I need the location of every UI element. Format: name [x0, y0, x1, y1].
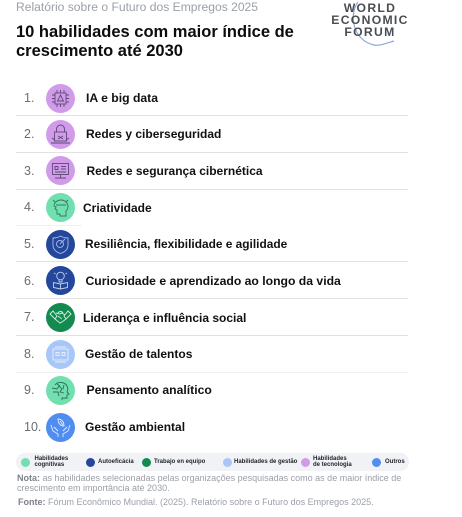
- legend: cognitivas: [34, 462, 64, 468]
- icon: hands holding leaf: [46, 413, 75, 442]
- row 5: [24, 230, 287, 259]
- icon: creative head: [46, 193, 75, 222]
- row 1: IA e big data: [86, 91, 158, 105]
- row 4: [24, 193, 152, 222]
- row 4: Criatividade: [83, 200, 152, 214]
- logo: World Economic Forum: [331, 0, 409, 46]
- note: [17, 472, 401, 493]
- note: crescimento em importância até 2030.: [17, 483, 170, 493]
- row 5: 5.: [24, 237, 34, 251]
- icon: lightbulb over book: [46, 266, 75, 295]
- row 10: [24, 413, 185, 442]
- row 6: [24, 266, 341, 295]
- icon: handshake: [46, 303, 75, 332]
- legend: Autoeficácia: [98, 459, 134, 465]
- logo: World Economic Forum: ECONOMIC: [331, 12, 409, 26]
- legend: Habilidades de gestão: [234, 459, 297, 465]
- icon: shield target: [46, 230, 75, 259]
- row 6: Curiosidade e aprendizado ao longo da vida: [86, 274, 341, 288]
- legend: Trabajo en equipo: [154, 459, 205, 465]
- row 8: [24, 340, 192, 369]
- row 6: 6.: [24, 274, 34, 288]
- row 2: 2.: [24, 127, 34, 141]
- row 7: Liderança e influência social: [83, 310, 246, 324]
- legend: de tecnologia: [313, 462, 352, 468]
- row 8: Gestão de talentos: [85, 347, 192, 361]
- row 8: 8.: [24, 347, 34, 361]
- row 7: 7.: [24, 310, 34, 324]
- row 10: Gestão ambiental: [85, 420, 185, 434]
- row 4: 4.: [24, 200, 34, 214]
- icon: AI chip: [46, 84, 75, 113]
- row 7: [24, 303, 246, 332]
- logo: World Economic Forum: FORUM: [344, 24, 396, 38]
- row 3: 3.: [24, 164, 34, 178]
- row 2: [24, 120, 221, 149]
- legend: Habilidades: [313, 456, 347, 462]
- title: crescimento até 2030: [16, 42, 183, 60]
- row 9: [24, 376, 212, 405]
- row 9: 9.: [24, 383, 34, 397]
- note: Nota: as habilidades selecionadas pelas organizações pesquisadas como as de maior índice de: [17, 472, 401, 482]
- row 5: Resiliência, flexibilidade e agilidade: [85, 237, 287, 251]
- legend: Outros: [385, 459, 405, 465]
- row 3: [24, 156, 263, 185]
- row 3: Redes e segurança cibernética: [86, 164, 263, 178]
- row dividers: [16, 115, 408, 373]
- icon: talent management: [46, 340, 75, 369]
- row 9: Pensamento analítico: [86, 383, 212, 397]
- report name: Relatório sobre o Futuro dos Empregos 2025: [16, 0, 258, 14]
- icon: secure monitor: [46, 156, 75, 185]
- row 2: Redes y ciberseguridad: [86, 127, 221, 141]
- row 10: 10.: [24, 420, 41, 434]
- source: Fonte: Fórum Econômico Mundial. (2025). Relatório sobre o Futuro dos Empregos 2025.: [18, 497, 374, 507]
- row 1: 1.: [24, 91, 34, 105]
- title: 10 habilidades com maior índice de: [16, 23, 294, 41]
- icon: padlock: [46, 120, 75, 149]
- legend: [16, 453, 409, 471]
- legend: Habilidades: [34, 456, 68, 462]
- icon: analytical head: [46, 376, 75, 405]
- row 1: [24, 84, 158, 113]
- logo: World Economic Forum: WORLD: [344, 0, 396, 14]
- title: [16, 23, 294, 60]
